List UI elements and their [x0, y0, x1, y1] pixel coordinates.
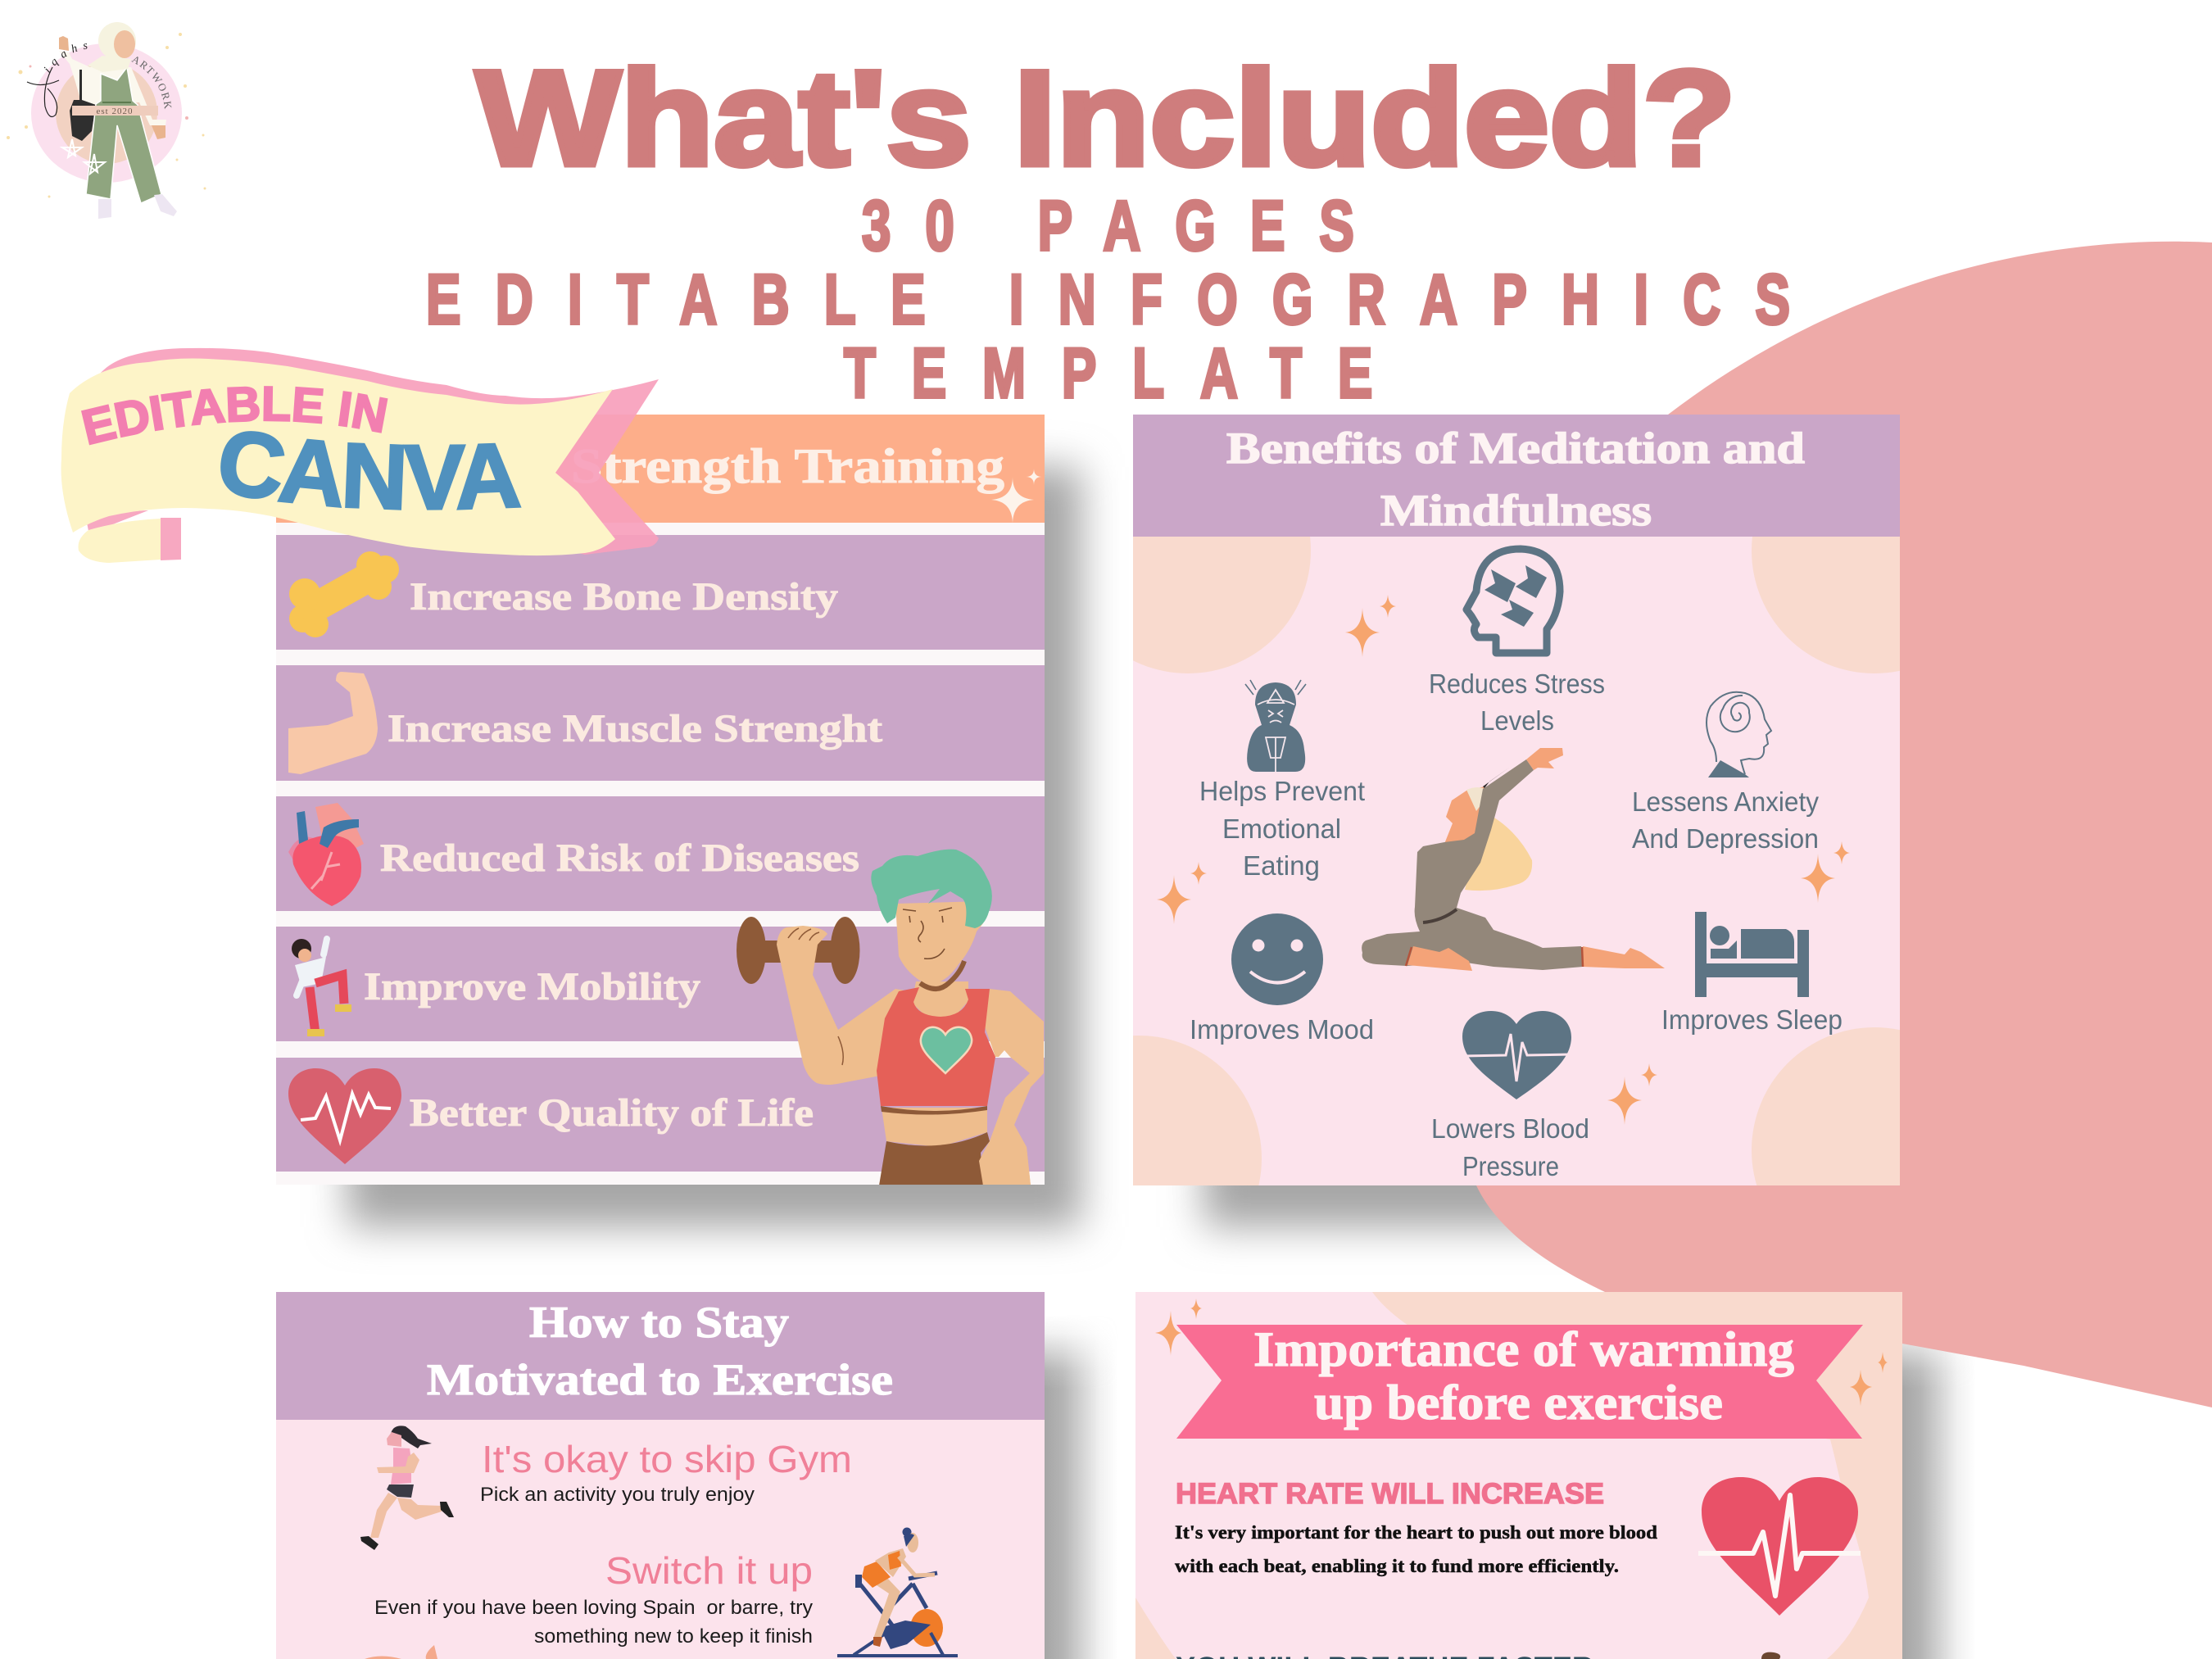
hair [871, 850, 992, 928]
ankle bands [1406, 947, 1583, 967]
bag [70, 70, 96, 141]
ribbon text: Importance of warming [1253, 1322, 1794, 1376]
text: heart rate body: It's very important for the heart to push out more blood [1175, 1522, 1657, 1543]
lower hand [152, 125, 165, 139]
illustration: yoga woman [1362, 748, 1665, 971]
subtitle block [426, 188, 1790, 413]
foot [873, 1637, 882, 1647]
card 4 background [1135, 1292, 1902, 1659]
label: improves sleep: Improves Sleep [1661, 1004, 1843, 1035]
header text [427, 1298, 893, 1404]
ribbon back pink [101, 348, 659, 555]
label: Increase Muscle Strenght [388, 707, 882, 750]
dumbbell [737, 917, 860, 984]
neck band [920, 961, 964, 989]
front foot [1407, 946, 1472, 971]
finger lines [788, 928, 843, 1065]
logo: peach circle [56, 62, 157, 164]
logo: signature: iqahs [44, 43, 87, 73]
runner hair [391, 1426, 432, 1448]
label: Reduced Risk of Diseases [380, 836, 859, 880]
hand over shorts [979, 1125, 1031, 1185]
label: lowers blood pressure [1431, 1113, 1589, 1181]
background blob [1393, 242, 2212, 1407]
icon: heart pulse [1462, 1011, 1571, 1099]
label: helps prevent [1199, 776, 1365, 881]
ribbon text: canva: CANVA [220, 431, 521, 510]
gap triangle [999, 1050, 1010, 1057]
runner front leg [370, 1493, 397, 1538]
card 2 background [1133, 415, 1900, 1185]
frame [858, 1573, 937, 1626]
icon: stepping boy [292, 939, 351, 1036]
sparkles [1155, 1299, 1888, 1406]
header text: Benefits of Meditation and [1226, 424, 1805, 473]
hair [1465, 811, 1532, 891]
top [888, 1551, 901, 1570]
logo: signature [26, 43, 87, 118]
ribbon: editable in canva [61, 347, 659, 563]
ribbon curl cream [79, 519, 161, 563]
logo: pink circle [31, 43, 182, 183]
header sparkles [991, 469, 1042, 524]
label: lessens anxiety [1632, 786, 1819, 854]
raised hand [59, 36, 69, 51]
runner arm [377, 1453, 419, 1473]
icon: bone [289, 551, 399, 637]
text: even if: something new to keep it finish [534, 1625, 813, 1648]
label: helps prevent: Helps Prevent [1199, 776, 1365, 806]
row: mobility [276, 927, 1045, 1041]
scarf [88, 56, 131, 72]
ribbon text: editable in: EDITABLE IN [81, 386, 388, 446]
label: helps prevent: Eating [1243, 850, 1320, 881]
shorts [879, 1132, 990, 1185]
face lines [903, 908, 952, 959]
header text: Strength Training [571, 439, 1004, 493]
back skin [875, 1548, 906, 1577]
icon: red heart [1698, 1477, 1861, 1616]
icon: heart with pulse [288, 1068, 401, 1164]
header text: Motivated to Exercise [427, 1355, 893, 1404]
label: lessens anxiety: And Depression [1632, 823, 1819, 854]
header text [1226, 424, 1805, 535]
hijab [98, 22, 136, 60]
label: Improve Mobility [364, 965, 700, 1009]
arm [899, 1557, 935, 1575]
runner shoes [360, 1502, 454, 1550]
head [1444, 786, 1484, 844]
right arm [979, 989, 1044, 1185]
face [114, 30, 135, 58]
panel: warming up [1135, 1292, 1902, 1659]
bun and head [903, 1527, 911, 1537]
heading: switch it up: Switch it up [605, 1549, 813, 1592]
icon: stressed woman [1245, 680, 1306, 772]
runner shorts [387, 1484, 414, 1498]
heading: skip gym: It's okay to skip Gym [482, 1438, 852, 1480]
label: reduces stress: Reduces Stress [1429, 669, 1605, 699]
card 1 base [276, 415, 1045, 1185]
logo [7, 22, 206, 219]
icon: head with stress [1466, 549, 1560, 653]
belt [102, 102, 131, 103]
row: bone density [276, 535, 1045, 650]
label: Better Quality of Life [410, 1091, 814, 1135]
ribbon front cream [61, 359, 615, 555]
heading: heart rate: HEART RATE WILL INCREASE [1176, 1478, 1604, 1510]
label: reduces stress: Levels [1480, 705, 1554, 736]
back foot [1583, 946, 1665, 968]
hair cap [1466, 787, 1486, 811]
icon: cyclist [837, 1527, 958, 1656]
card 3 background [276, 1292, 1045, 1659]
chest skin [912, 981, 968, 1018]
text: heart rate body: with each beat, enabling it to fund more efficiently. [1175, 1556, 1619, 1576]
top hem [881, 1106, 987, 1115]
icon: bed [1695, 912, 1809, 997]
label: lessens anxiety: Lessens Anxiety [1632, 786, 1819, 817]
subtitle: editable infographics: EDITABLE INFOGRAPHICS [426, 261, 1790, 339]
text: even if: Even if you have been loving Spain or barre, try [374, 1597, 813, 1619]
logo: figure [59, 22, 177, 219]
label: reduces stress [1429, 669, 1605, 736]
title: What's Included? [476, 43, 1736, 193]
subtitle: template: TEMPLATE [844, 335, 1372, 413]
logo: artwork arc: ARTWORK [131, 57, 172, 110]
midriff [882, 1108, 987, 1147]
icon: smiley [1231, 913, 1323, 1005]
belt [1423, 909, 1457, 922]
label: Increase Bone Density [410, 575, 838, 619]
logo: confetti dots [7, 33, 206, 198]
stars [62, 139, 105, 174]
row: quality of life [276, 1058, 1045, 1172]
label: lowers blood pressure: Lowers Blood [1431, 1113, 1589, 1144]
label: improves mood: Improves Mood [1190, 1014, 1374, 1045]
blouse [59, 51, 166, 125]
runner back leg [397, 1498, 442, 1520]
guard [880, 1620, 931, 1649]
icon: muscle [288, 672, 378, 774]
ribbon text [1253, 1322, 1794, 1430]
text: even if [374, 1597, 813, 1648]
text: heart rate body [1175, 1522, 1657, 1576]
row: muscle [276, 665, 1045, 781]
dark hair strip [1483, 768, 1509, 788]
seat [855, 1575, 862, 1588]
hand [1526, 748, 1563, 770]
label: helps prevent: Emotional [1222, 814, 1341, 844]
label: lowers blood pressure: Pressure [1462, 1151, 1559, 1181]
header band [1133, 415, 1900, 537]
header text: Mindfulness [1380, 486, 1652, 535]
wheel [910, 1609, 943, 1647]
subtitle: 30 pages: 30 PAGES [862, 188, 1354, 265]
shorts [862, 1562, 891, 1588]
panel: meditation benefits [1133, 415, 1900, 1185]
icon: partial figure [365, 1645, 437, 1659]
text: pick an activity: Pick an activity you truly enjoy [480, 1484, 755, 1506]
peach background shape [1135, 1292, 1902, 1659]
arm [777, 926, 909, 1085]
icon: anatomical heart [288, 803, 364, 906]
ribbon text: up before exercise [1314, 1376, 1723, 1430]
body [1362, 759, 1583, 970]
sparkles [1157, 595, 1850, 1125]
shoes [98, 194, 177, 219]
top [877, 987, 995, 1106]
jumpsuit [86, 67, 161, 203]
panel: stay motivated [276, 1292, 1045, 1659]
icon: runner [360, 1426, 454, 1550]
row: diseases [276, 796, 1045, 911]
illustration: trainer with dumbbell [737, 850, 1044, 1185]
logo: banner [72, 106, 158, 116]
panel: strength training [276, 415, 1045, 1185]
header text: How to Stay [529, 1298, 789, 1347]
runner top [391, 1448, 411, 1484]
card drop shadows [347, 467, 1976, 1659]
base [837, 1633, 958, 1656]
logo: est 2020: est 2020 [97, 107, 133, 116]
icon: spiral head [1707, 692, 1771, 777]
head [895, 901, 983, 984]
leg [873, 1577, 900, 1639]
header band [276, 415, 1045, 523]
heart on top [921, 1027, 972, 1073]
runner face [387, 1432, 401, 1447]
peach corner circles [1133, 537, 1900, 1185]
header band [276, 1292, 1045, 1420]
ribbon banner [1176, 1325, 1863, 1439]
icon: partial figure [1761, 1652, 1780, 1659]
ribbon tail pink strip [87, 510, 181, 560]
